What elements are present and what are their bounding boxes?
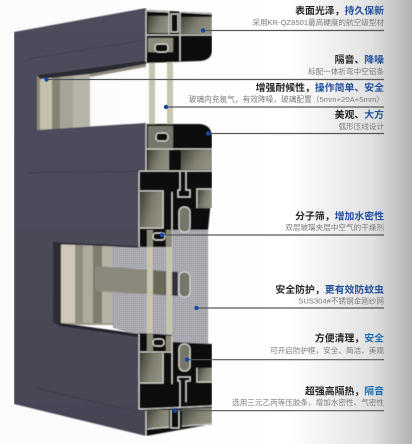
callout: appearance: [206, 108, 384, 136]
callout: appearance: 弧形压线设计: [338, 121, 384, 131]
horizontal screen bar: [95, 266, 178, 296]
callout: sound insulation: [44, 53, 384, 82]
callout: security mesh: 安全防护，更有效防蚊虫: [275, 283, 384, 296]
mesh screen: [113, 228, 208, 345]
top profile: [146, 10, 212, 63]
screen bar oval: [179, 272, 190, 297]
callout: security mesh: [194, 283, 384, 310]
callout: easy cleaning: 可开启防护框，安全、简洁、美观: [270, 345, 384, 355]
callout: appearance: 美观、大方: [335, 108, 384, 121]
frame highlights: [27, 40, 146, 412]
callout: surface finish: [201, 4, 384, 33]
middle profile: [139, 124, 212, 247]
glass panes: [147, 60, 173, 334]
callout: weather resistance: [164, 81, 384, 109]
panel: anthracite frame: [14, 8, 146, 436]
callout: weather resistance: 增强耐候性，操作简单、安全: [256, 81, 384, 94]
callout: molecular sieve: 分子筛，增加水密性: [295, 210, 384, 222]
callout: thermal insulation: 选用三元乙丙等压胶条，增加水密性、气密性: [232, 397, 384, 407]
screen profile bead: [147, 230, 172, 247]
upper opening interior: [37, 60, 146, 131]
callout: surface finish: 表面光泽，持久保新: [295, 4, 384, 17]
callout: thermal insulation: [173, 384, 384, 413]
callout: easy cleaning: 方便清理，安全: [315, 332, 384, 344]
callout: surface finish: 采用KR-QZ8501最高硬度的航空级型材: [252, 17, 384, 27]
bottom profile: [139, 333, 212, 436]
callout: weather resistance: 玻璃内充氩气，有效降噪，玻璃配置（5mm+20A+5mm）: [189, 94, 384, 104]
callout: sound insulation: 隔音、降噪: [335, 53, 384, 66]
callout: easy cleaning: [185, 332, 384, 362]
lower opening interior: [53, 243, 113, 325]
callout: sound insulation: 标配一体折弯中空铝条: [308, 66, 384, 76]
window cutaway illustration: [14, 8, 212, 436]
callout: security mesh: SUS304#不锈钢金刚纱网: [298, 296, 384, 306]
callout: thermal insulation: 超强高隔热，隔音: [305, 384, 384, 398]
callout: molecular sieve: 双层玻璃夹层中空气的干燥剂: [285, 222, 384, 232]
callout: molecular sieve: [160, 210, 384, 237]
